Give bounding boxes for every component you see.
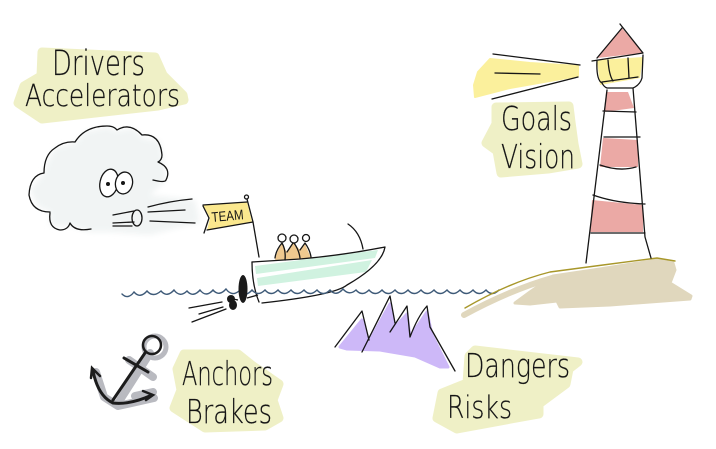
icon: underwater rocks <box>335 296 455 371</box>
flag: TEAM: TEAM <box>211 206 244 225</box>
label: Goals Vision: Goals <box>501 99 572 138</box>
crew of three people <box>275 234 311 260</box>
lighthouse lantern room <box>597 57 643 85</box>
light beam <box>474 54 580 99</box>
boat motor and wake <box>189 275 258 322</box>
lighthouse <box>586 24 651 263</box>
lighthouse outline <box>586 24 651 263</box>
flag: TEAM <box>203 195 259 257</box>
label: Goals Vision <box>486 99 578 176</box>
label: Goals Vision: Vision <box>501 137 575 176</box>
label: Anchors Brakes <box>174 354 279 431</box>
label: Dangers Risks <box>437 346 578 429</box>
icon: blowing cloud <box>29 126 200 235</box>
label: Drivers Accelerators: Accelerators <box>25 79 180 114</box>
label: Drivers Accelerators <box>18 44 184 119</box>
icon: anchor <box>91 336 166 406</box>
lighthouse roof <box>597 28 643 58</box>
label: Anchors Brakes: Anchors <box>182 354 273 393</box>
label: Dangers Risks: Risks <box>447 390 512 426</box>
label: Dangers Risks: Dangers <box>465 346 570 385</box>
label: Anchors Brakes: Brakes <box>186 392 272 431</box>
lighthouse stripes <box>590 92 643 232</box>
label: Drivers Accelerators: Drivers <box>52 44 145 84</box>
boat <box>252 224 385 303</box>
ground: island <box>464 258 691 315</box>
water waves <box>122 289 499 297</box>
